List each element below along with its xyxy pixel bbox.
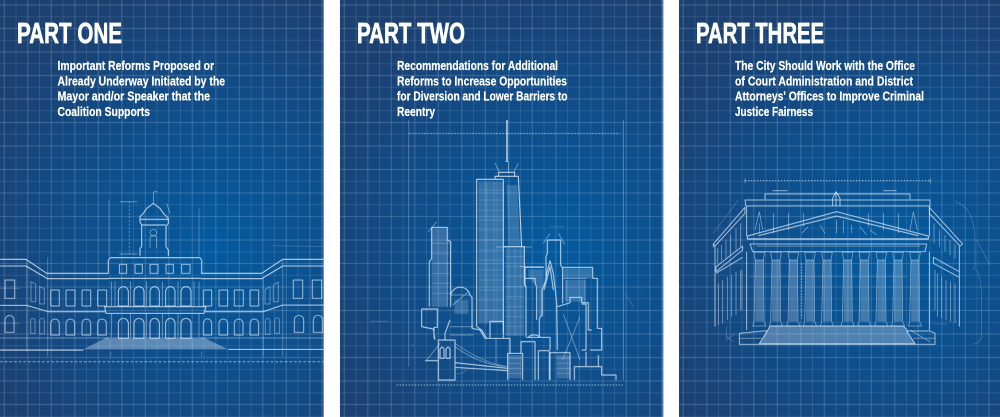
text block: part one description: Already Underway Initiated by the	[58, 73, 225, 88]
text block: part one description	[58, 58, 225, 119]
text block: part three description: Justice Fairness	[735, 104, 813, 119]
text block: part three description: Attorneys' Offices to Improve Criminal	[735, 88, 924, 104]
text block: part two description: Reentry	[397, 104, 436, 119]
text block: part one description: Mayor and/or Speaker that the	[58, 88, 210, 104]
text block: part two description	[397, 58, 568, 119]
heading: part three: PART THREE	[696, 18, 824, 50]
text block: part two description: for Diversion and Lower Barriers to	[397, 88, 568, 104]
panel: part two	[340, 0, 664, 417]
heading: part two: PART TWO	[357, 18, 465, 50]
text block: part three description: The City Should Work with the Office	[735, 58, 915, 73]
text block: part three description	[735, 58, 924, 119]
text block: part one description: Important Reforms Proposed or	[58, 58, 214, 73]
panel one background	[0, 0, 324, 417]
text block: part three description: of Court Administration and District	[735, 73, 914, 88]
heading: part one: PART ONE	[17, 18, 122, 50]
illustration: manhattan skyline	[370, 120, 633, 385]
panel two background	[340, 0, 664, 417]
illustration: city hall	[0, 191, 324, 362]
panel three background	[679, 0, 1000, 417]
text block: part two description: Recommendations for Additional	[397, 58, 558, 73]
illustration: courthouse	[713, 178, 990, 344]
panel: part one	[0, 0, 324, 417]
panel: part three	[679, 0, 1000, 417]
text block: part two description: Reforms to Increase Opportunities	[397, 73, 567, 88]
text block: part one description: Coalition Supports	[58, 104, 150, 119]
